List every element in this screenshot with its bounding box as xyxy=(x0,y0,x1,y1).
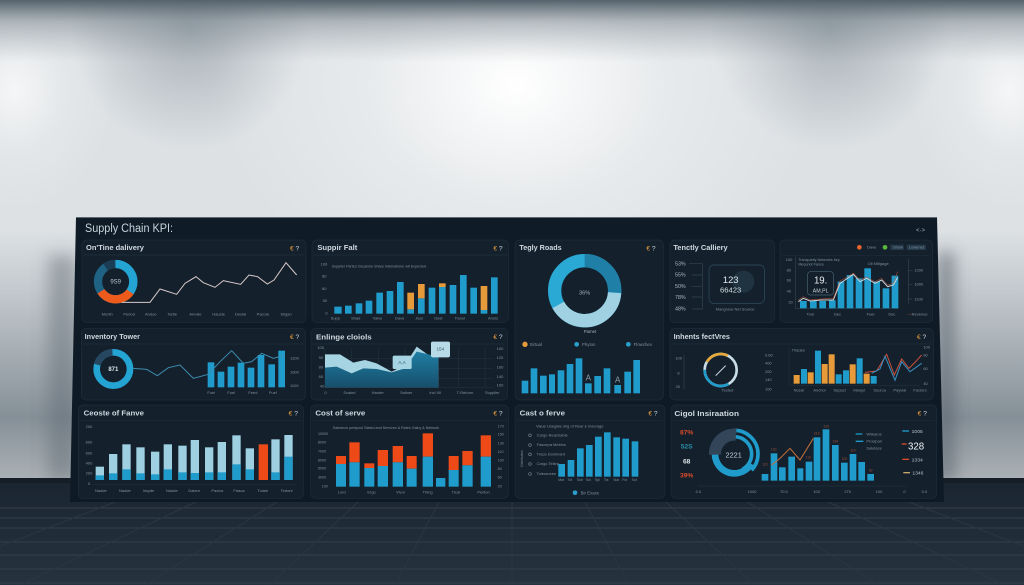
stacked bar chart: 110 xyxy=(498,450,504,454)
stacked bar chart: Ergo xyxy=(367,490,377,495)
stacked bar chart: 400 xyxy=(86,461,93,466)
bar and line chart: 140 xyxy=(765,377,772,382)
percent labels: 55% xyxy=(675,273,686,279)
right metrics: 1005 xyxy=(912,429,923,435)
stacked bar chart: 130 xyxy=(498,441,504,445)
callout xyxy=(393,356,412,369)
bar chart: A xyxy=(615,376,621,385)
stacked bar chart: 170 xyxy=(498,424,504,428)
stacked bar chart xyxy=(86,424,297,493)
combo bar and line chart: Oil Mitigage xyxy=(868,261,889,266)
heading: cargo insurance: Cigol Insiraation xyxy=(674,409,739,418)
title: Supply Chain KPI: Supply Chain KPI: xyxy=(85,223,173,235)
panel: cost of serve list and bars: Value Usegate mig of Rear £ Insurage xyxy=(536,424,604,429)
panel: inventory features: 100 xyxy=(675,356,683,361)
stacked bar chart: 80 xyxy=(498,467,502,471)
stacked bar chart: 100 xyxy=(498,458,504,462)
panel: cost of serve list and bars: Spl xyxy=(595,478,600,482)
line chart xyxy=(122,263,297,302)
panel: cost of serve red bars xyxy=(311,405,508,498)
legend: Bir Exaxs xyxy=(581,490,599,495)
combo bar and line chart xyxy=(133,351,300,395)
chart legend: Salutace xyxy=(866,446,883,451)
panel: supply roads donut and bars xyxy=(515,240,663,400)
icon list: Tolerances xyxy=(537,471,556,476)
bar chart: 80 xyxy=(322,273,327,278)
donut chart: 871 xyxy=(108,367,119,373)
area chart: Saliner xyxy=(400,390,413,395)
combo bar and line chart: Dec xyxy=(888,312,895,317)
stacked bar chart: 5000 xyxy=(318,467,326,471)
area chart: 100 xyxy=(497,383,504,388)
panel: cost of serve list and bars: Sub xyxy=(613,478,619,482)
bar and line chart: Factors xyxy=(913,388,927,393)
bar chart: Shad xyxy=(351,315,360,320)
bottom axis: 100 xyxy=(813,489,821,494)
bar chart: Jeal xyxy=(415,315,423,320)
panel: combo chart with legend xyxy=(780,240,933,323)
panel: cost of serve list and bars: Sot xyxy=(632,478,637,482)
metric box xyxy=(808,272,833,295)
stacked bar chart: Vivor xyxy=(396,490,406,495)
heading: on-time delivery: On'Tine dalivery xyxy=(86,243,145,252)
icon: panel controls: € ? xyxy=(290,334,300,341)
stacked bar chart: 3000 xyxy=(318,475,326,479)
axis labels: Period xyxy=(123,311,135,316)
area chart: 140 xyxy=(497,374,504,379)
chart legend: Wilkaros xyxy=(866,431,882,436)
bottom axis: 0.0 xyxy=(696,489,702,494)
stacked bar chart: Tulale xyxy=(257,488,269,493)
bottom axis: 1000 xyxy=(748,489,757,494)
stacked bar chart: 600 xyxy=(86,450,93,455)
legend xyxy=(573,490,599,495)
metric numbers: 87% xyxy=(680,430,693,437)
panel: cost of serve list and bars: Tot xyxy=(568,478,572,482)
combo bar and line chart: 123 xyxy=(762,462,768,466)
donut chart: 2221 xyxy=(726,450,742,459)
donut chart xyxy=(93,349,134,389)
legend: Sirtual xyxy=(530,342,542,347)
legend: Phyton xyxy=(582,342,596,347)
bar chart: Valve xyxy=(373,315,383,320)
chart legend xyxy=(856,431,883,451)
stacked bar chart: 150 xyxy=(498,433,504,437)
combo bar and line chart: Fuel xyxy=(867,312,875,317)
bottom axis: 70.0 xyxy=(780,489,789,494)
heading: inventory turnover: Inventory Tower xyxy=(85,332,140,341)
icon list: Fascepa Metrics xyxy=(537,442,566,447)
right metrics: 1346 xyxy=(912,471,924,477)
donut chart xyxy=(91,257,140,306)
icon: panel controls: € ? xyxy=(918,411,927,418)
percent labels: 48% xyxy=(675,307,686,313)
axis labels: Anvale xyxy=(189,311,202,316)
stacked bar chart: Lord xyxy=(338,490,346,495)
icon list xyxy=(520,432,568,476)
area chart: Incl 90 xyxy=(429,390,442,395)
panel: cost of service stacked light bars xyxy=(78,405,303,498)
percent labels: 50% xyxy=(675,284,686,290)
area chart: 90 xyxy=(319,355,324,360)
stacked bar chart: 200 xyxy=(86,424,93,429)
combo bar and line chart: 80 xyxy=(787,268,792,273)
icon list: Cargo Tellep xyxy=(537,461,560,466)
callout xyxy=(431,342,450,357)
donut chart: 9S9 xyxy=(110,280,122,286)
icon: panel controls: € ? xyxy=(648,411,658,418)
stacked bar chart: 0 xyxy=(88,481,91,486)
heading: cost of serve: Cast o ferve xyxy=(520,409,565,418)
axis labels: Pacola xyxy=(257,311,270,316)
bar chart: 60 xyxy=(322,286,327,291)
legend: Show xyxy=(893,245,903,250)
panel: cost of serve list and bars: Sol xyxy=(586,478,591,482)
bar and line chart: 80 xyxy=(923,353,929,358)
callout: 154 xyxy=(436,347,445,352)
panel: timely delivery xyxy=(670,240,774,323)
panel: cost of serve list and bars xyxy=(515,405,665,498)
area chart: Supplier xyxy=(485,390,500,395)
stacked bar chart: Nadde xyxy=(95,488,108,493)
legend: Lowered xyxy=(909,245,924,250)
bar chart: Dest xyxy=(434,315,443,320)
donut chart: 36% xyxy=(579,290,590,296)
stacked bar chart: 6000 xyxy=(318,458,326,462)
bar and line chart: 400 xyxy=(765,361,772,366)
icon: panel controls: € ? xyxy=(290,245,300,252)
bottom axis: 100 xyxy=(876,489,883,494)
bar chart: Dave xyxy=(395,315,405,320)
bar chart: Ansio xyxy=(488,315,499,320)
combo bar and line chart: 1200 xyxy=(914,267,924,272)
bar chart: Faoul xyxy=(455,315,465,320)
panel: inventory features xyxy=(670,328,933,400)
bar and line chart: Anchor xyxy=(813,388,827,393)
icon: panel controls: € ? xyxy=(289,411,298,418)
combo bar and line chart: Tool xyxy=(807,312,814,317)
combo bar and line chart xyxy=(762,424,874,481)
stacked bar chart: 60 xyxy=(498,476,502,480)
stacked bar chart: Nadde xyxy=(166,488,179,493)
heading: supply roads: Tegly Roads xyxy=(519,243,562,252)
area chart: 100 xyxy=(497,346,504,351)
combo bar and line chart: 213 xyxy=(814,432,820,436)
panel: earnings details xyxy=(311,328,508,400)
panel: cost of serve list and bars: Tot xyxy=(604,478,609,482)
stacked bar chart: Thing xyxy=(423,490,433,495)
bar chart: 0 xyxy=(325,310,328,315)
combo bar and line chart: 40 xyxy=(787,289,792,294)
icon list: Cargo Reachable xyxy=(537,432,568,437)
area chart: T-Reform xyxy=(457,390,474,395)
panel: inventory features: 20 xyxy=(676,384,681,389)
panel: inventory features: Tested xyxy=(722,388,733,393)
combo bar and line chart: 1000 xyxy=(290,370,300,375)
bar and line chart: 100 xyxy=(765,386,772,391)
legend xyxy=(522,342,653,347)
stacked bar chart: Tical xyxy=(452,490,460,495)
combo bar and line chart: 100 xyxy=(786,257,793,262)
bar and line chart: 60 xyxy=(923,366,929,371)
stacked bar chart xyxy=(318,424,504,495)
stacked bar chart: 20 xyxy=(498,484,502,488)
metric box: AM,PL xyxy=(813,289,829,295)
stacked bar chart: Dalarn xyxy=(188,488,200,493)
bottom axis xyxy=(696,486,928,494)
combo bar and line chart: —Revenue xyxy=(908,312,928,317)
axis labels: Andoo xyxy=(145,311,157,316)
metric numbers: 68 xyxy=(683,458,691,465)
axis labels: Eligan xyxy=(281,311,292,316)
right metrics xyxy=(902,429,924,477)
metric box with globe xyxy=(709,265,764,303)
bar and line chart: Tirades xyxy=(792,348,805,353)
combo bar and line chart xyxy=(786,257,928,317)
combo bar and line chart: Fuel xyxy=(207,390,215,395)
combo bar and line chart: 210 xyxy=(824,424,829,428)
right metrics: 328 xyxy=(908,441,924,452)
combo bar and line chart: 60 xyxy=(787,278,792,283)
stacked bar chart: Tedore xyxy=(281,488,294,493)
area chart: 80 xyxy=(319,365,324,370)
bottom axis: 270 xyxy=(844,489,852,494)
stacked bar chart: Nadde xyxy=(119,488,132,493)
combo bar and line chart: Fuel xyxy=(227,390,235,395)
combo bar and line chart: 120 xyxy=(771,448,777,452)
legend xyxy=(857,245,926,250)
area chart: 0 xyxy=(324,390,327,395)
icon: panel controls: € ? xyxy=(493,411,503,418)
bar and line chart: Sepact xyxy=(833,388,847,393)
stacked bar chart: 8000 xyxy=(318,441,326,445)
axis labels: Month xyxy=(102,311,113,316)
panel: cost of serve list and bars: Fot xyxy=(622,478,627,482)
heading: supplier fault: Suppir Falt xyxy=(317,243,358,252)
icon: top right controls: <·> xyxy=(916,228,926,234)
area chart: 100 xyxy=(317,345,325,350)
axis labels: Deulal xyxy=(235,311,246,316)
panel: on-time delivery xyxy=(82,240,306,322)
combo bar and line chart: 1100 xyxy=(290,383,299,388)
combo bar and line chart: 20 xyxy=(788,299,794,304)
bar and line chart: 100 xyxy=(923,344,931,349)
combo bar and line chart: 1100 xyxy=(914,296,924,301)
area chart: 100 xyxy=(497,365,504,370)
bar and line chart: Payvial xyxy=(893,388,906,393)
area chart xyxy=(317,342,504,395)
bar chart: 50 xyxy=(323,298,328,303)
bar and line chart: 0.60 xyxy=(765,352,774,357)
bar and line chart: 200 xyxy=(765,369,772,374)
stacked bar chart: 200 xyxy=(86,471,93,476)
icon: panel controls: € ? xyxy=(493,245,503,252)
donut chart xyxy=(708,428,761,480)
combo bar and line chart: 190 xyxy=(833,439,838,443)
combo bar and line chart: Dec xyxy=(834,312,841,317)
bottom axis: 0 xyxy=(903,489,906,494)
icon list: Trace Dominant xyxy=(537,451,566,456)
chart legend: Procipan xyxy=(866,439,882,444)
area chart: Scaled xyxy=(343,390,356,395)
panel: cost of serve list and bars: Sub xyxy=(577,478,583,482)
stacked bar chart: 600 xyxy=(86,440,93,445)
bar chart: 100 xyxy=(321,262,328,267)
stacked bar chart: Insyde xyxy=(143,488,155,493)
heading: inventory features: Inhents fectVres xyxy=(674,332,730,341)
metric box with globe: 123 xyxy=(723,275,738,285)
percent labels: 78% xyxy=(675,295,686,301)
floor grid xyxy=(0,478,1024,585)
metric numbers: 39% xyxy=(680,472,693,479)
bar chart: Supplier Partes Oscalone Share Internatione wit Expected xyxy=(332,264,426,268)
panel: inventory features: 8 xyxy=(677,370,680,375)
combo bar and line chart: 1200 xyxy=(290,356,300,361)
icon: panel controls: € ? xyxy=(493,334,503,341)
axis labels: Hauste xyxy=(212,311,226,316)
stacked bar chart: 100 xyxy=(322,484,328,488)
combo bar and line chart: 110 xyxy=(850,448,856,452)
heading: cost of service: Ceoste of Fanve xyxy=(84,408,144,417)
heading: timely delivery: Tenctly Calliery xyxy=(673,243,728,252)
stacked bar chart: 7000 xyxy=(318,450,326,454)
legend: Dave xyxy=(867,245,877,250)
bar chart: A xyxy=(586,374,592,383)
stacked bar chart: Pavica xyxy=(211,488,224,493)
bar and line chart xyxy=(765,344,931,393)
board shadow on wall xyxy=(48,252,954,480)
panel: timely delivery: Mangrove Net Source xyxy=(716,307,755,312)
stacked bar chart: 10000 xyxy=(318,432,328,436)
combo bar and line chart: Transparity Networks bey xyxy=(798,258,840,262)
dashboard board xyxy=(70,217,944,502)
heading: earnings details: Enlinge cloiols xyxy=(316,332,372,341)
stacked bar chart: Fdaua xyxy=(233,488,245,493)
combo bar and line chart: 110 xyxy=(806,455,811,459)
stacked bar chart: Perilon xyxy=(477,490,490,495)
icon: panel controls: € ? xyxy=(646,245,656,252)
icon: panel controls: € ? xyxy=(917,334,927,341)
right metrics: 1334 xyxy=(912,457,923,463)
axis labels: Tartle xyxy=(167,311,178,316)
metric numbers: 52S xyxy=(681,444,693,451)
area chart: Harder xyxy=(372,390,385,395)
panel: supply roads donut and bars: Pamet xyxy=(584,329,597,334)
metric box: 19. xyxy=(814,276,827,287)
gauge xyxy=(698,348,743,392)
panel: inventory turnover xyxy=(81,328,305,400)
panel: cargo insurance xyxy=(671,405,937,498)
callout: A,A xyxy=(398,360,407,365)
combo bar and line chart: 120 xyxy=(842,457,847,461)
area chart: 40 xyxy=(320,383,325,388)
bar and line chart: Nosal xyxy=(794,388,804,393)
combo bar and line chart: Fuel xyxy=(269,390,277,395)
legend: Flowchev xyxy=(634,342,653,347)
area chart: 60 xyxy=(319,374,324,379)
bar and line chart: Manjut xyxy=(853,388,866,393)
donut chart xyxy=(553,259,617,323)
heading: cost of serve: Cost of serve xyxy=(315,409,365,418)
panel: supplier fault xyxy=(312,240,508,322)
stacked bar chart: Sateance pentpool Slated and Services & Rates Galny & Network xyxy=(333,426,439,430)
combo bar and line chart: 90 xyxy=(869,468,873,472)
bottom axis: 0.0 xyxy=(922,489,928,494)
bar chart xyxy=(522,358,640,393)
bar and line chart: Sourca xyxy=(873,388,887,393)
bar chart xyxy=(558,432,638,477)
percent labels: 53% xyxy=(675,262,686,268)
combo bar and line chart: 1000 xyxy=(914,282,924,287)
area chart: 120 xyxy=(497,355,504,360)
combo bar and line chart: Mequnot Fance xyxy=(798,263,824,267)
bar and line chart: 40 xyxy=(923,381,929,386)
bar chart xyxy=(321,262,499,320)
combo bar and line chart: Feed xyxy=(248,390,257,395)
panel: cost of serve list and bars: Mar xyxy=(558,478,565,482)
metric box with globe: 66423 xyxy=(720,286,741,295)
bar chart: Supp xyxy=(331,315,341,320)
icon list: Distribution xyxy=(520,450,524,467)
